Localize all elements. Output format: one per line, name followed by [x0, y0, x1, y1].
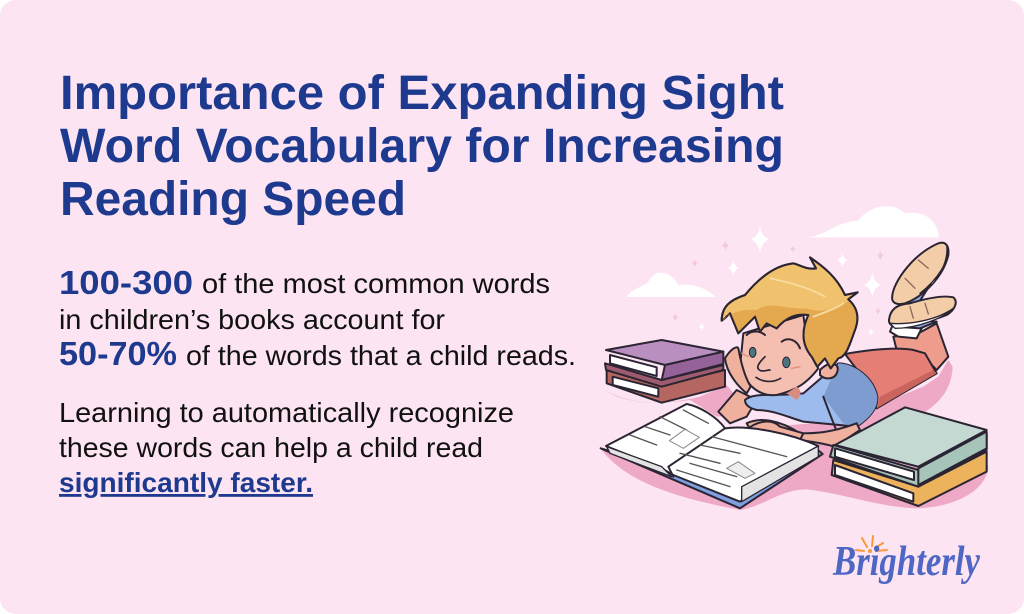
books left stack [605, 340, 725, 403]
text block: statistic: 50-70% [59, 335, 177, 372]
text block: statistic [59, 264, 576, 372]
eyes [749, 347, 790, 368]
text block: benefit: Learning to automatically recognize [59, 397, 514, 428]
text block: statistic: 100-300 [59, 264, 193, 301]
text block: statistic: of the words that a child reads. [186, 340, 576, 371]
nose and mouth [756, 357, 781, 381]
logo wordmark: Brighterly [832, 539, 980, 585]
boy [718, 243, 956, 447]
far arm and cheek hand [718, 390, 757, 423]
logo: Brighterly [832, 536, 980, 585]
text block: benefit: significantly faster. [59, 467, 313, 498]
near arm [747, 420, 860, 447]
hand on book [747, 422, 803, 442]
face [740, 315, 818, 395]
books right stack [830, 407, 987, 506]
sparkles [699, 226, 881, 336]
title: Word Vocabulary for Increasing [60, 120, 784, 173]
open book [601, 404, 823, 508]
cheek hand [725, 347, 751, 393]
logo sun rays [856, 536, 887, 553]
text block: statistic: of the most common words [202, 268, 550, 299]
lower shoe [889, 297, 956, 338]
illustration: boy reading with books [601, 206, 988, 510]
shirt [745, 363, 877, 427]
text block: benefit [59, 397, 514, 498]
floor shadow [602, 360, 988, 510]
text block: benefit: these words can help a child read [59, 432, 483, 463]
hair [722, 257, 858, 368]
title [60, 67, 784, 226]
title: Importance of Expanding Sight [60, 67, 784, 120]
text block: statistic: in children’s books account for [59, 304, 445, 335]
eyebrows [747, 331, 800, 348]
pants [845, 349, 937, 408]
upper shoe [892, 243, 948, 305]
title: Reading Speed [60, 173, 406, 226]
clouds [627, 206, 939, 297]
ear [820, 364, 838, 378]
lower legs [893, 323, 948, 370]
